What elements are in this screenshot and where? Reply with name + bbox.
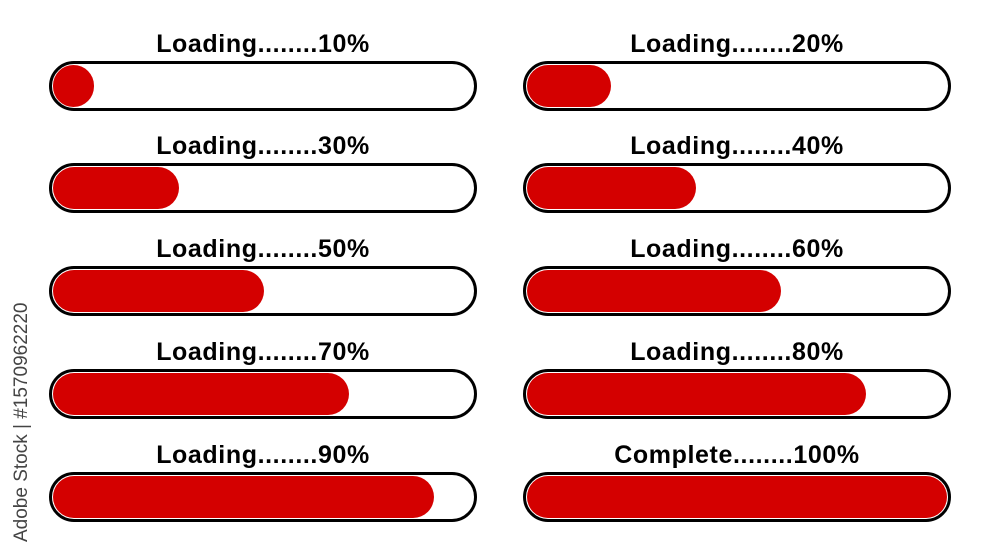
panel: 60% — [523, 235, 951, 316]
panel: 50%: Loading........50% — [156, 235, 370, 263]
panel: 70%: Loading........70% — [156, 338, 370, 366]
panel: 40% — [523, 132, 951, 213]
watermark text: Adobe Stock | #1570962220 — [11, 303, 32, 542]
panel: 30%: Loading........30% — [156, 132, 370, 160]
panel: 50% — [49, 235, 477, 316]
panel: 10% — [49, 30, 477, 111]
panel: 70% — [49, 338, 477, 419]
panel: 40%: Loading........40% — [630, 132, 844, 160]
panel: 80%: Loading........80% — [630, 338, 844, 366]
panel: 20%: Loading........20% — [630, 30, 844, 58]
panel: 100%: Complete........100% — [614, 441, 860, 469]
panel: 100% — [523, 441, 951, 522]
panel: 60%: Loading........60% — [630, 235, 844, 263]
panel: 10%: Loading........10% — [156, 30, 370, 58]
panel: 30% — [49, 132, 477, 213]
panel: 80% — [523, 338, 951, 419]
panel: 20% — [523, 30, 951, 111]
panel: 90%: Loading........90% — [156, 441, 370, 469]
panel: 90% — [49, 441, 477, 522]
